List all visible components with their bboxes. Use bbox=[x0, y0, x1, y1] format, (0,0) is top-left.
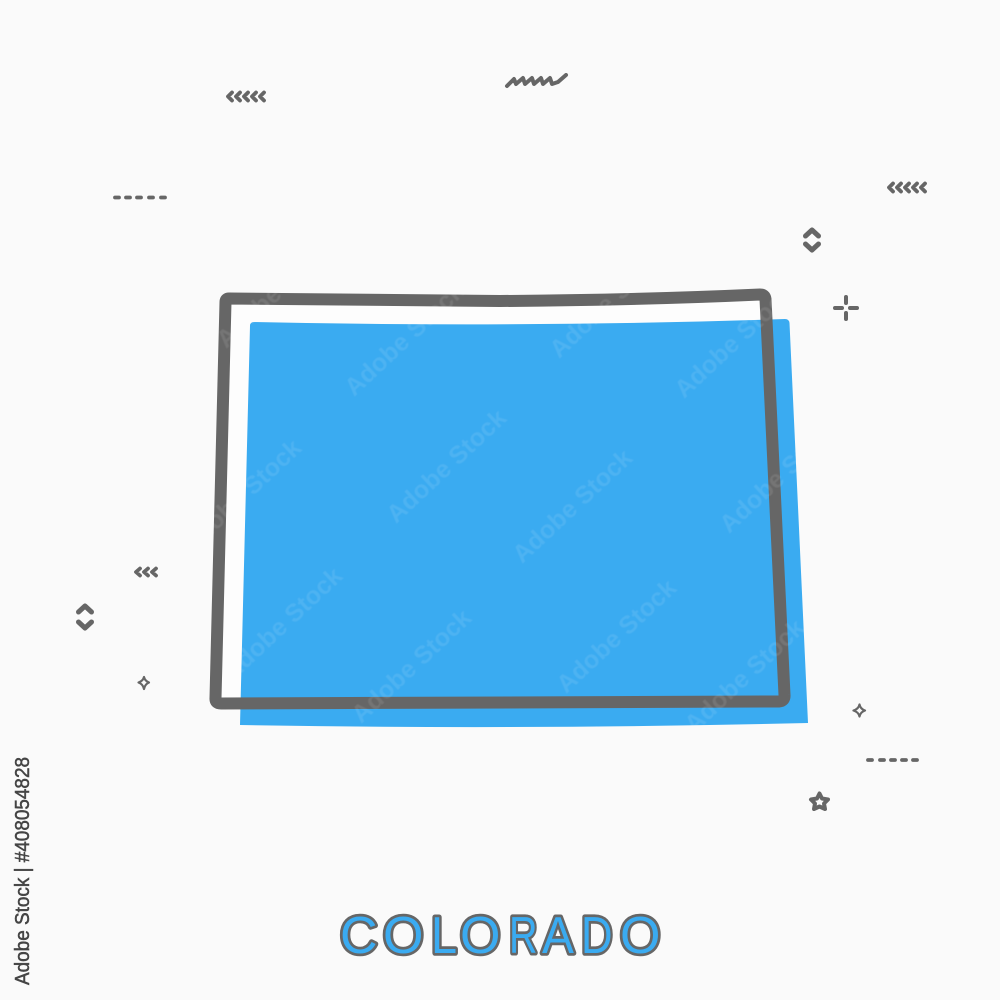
watermark pattern: Adobe Stock bbox=[679, 614, 810, 738]
watermark pattern: Adobe Stock bbox=[519, 774, 650, 898]
icon: chevrons top left bbox=[228, 92, 264, 100]
watermark pattern: Adobe Stock bbox=[829, 124, 960, 248]
watermark pattern: Adobe Stock bbox=[714, 414, 845, 538]
watermark pattern: Adobe Stock bbox=[59, 729, 190, 853]
watermark pattern: Adobe Stock bbox=[381, 404, 512, 528]
watermark pattern: Adobe Stock bbox=[184, 769, 315, 893]
icon: chevrons left bbox=[136, 568, 156, 576]
watermark pattern: Adobe Stock bbox=[859, 584, 990, 708]
watermark pattern: Adobe Stock bbox=[369, 69, 500, 193]
icon: dashes top left bbox=[115, 196, 165, 199]
watermark pattern: Adobe Stock bbox=[507, 444, 638, 568]
title: COLORADO: L bbox=[431, 907, 457, 965]
icon: up down chevrons right bbox=[806, 230, 818, 250]
watermark pattern: Adobe Stock bbox=[859, 249, 990, 373]
icon: star bbox=[811, 794, 828, 809]
watermark pattern: Adobe Stock bbox=[4, 264, 135, 388]
icon: up down chevrons left bbox=[78, 606, 92, 628]
watermark pattern: Adobe Stock bbox=[544, 239, 675, 363]
map: blue Colorado shape bbox=[240, 319, 808, 727]
watermark pattern: Adobe Stock bbox=[669, 279, 800, 403]
icon: sparkle left bbox=[138, 677, 149, 689]
title: COLORADO: R bbox=[509, 906, 538, 964]
watermark pattern: Adobe Stock bbox=[499, 111, 630, 235]
title: COLORADO: D bbox=[581, 908, 613, 965]
title: COLORADO: O bbox=[460, 907, 500, 965]
watermark pattern: Adobe Stock bbox=[702, 69, 833, 193]
icon: crosshair plus bbox=[835, 297, 857, 319]
title: COLORADO: O bbox=[620, 907, 660, 965]
icon: sparkle right bbox=[854, 704, 865, 716]
watermark pattern: Adobe Stock bbox=[849, 789, 980, 913]
title: COLORADO: C bbox=[340, 907, 378, 965]
watermark pattern: Adobe Stock bbox=[339, 277, 470, 401]
map: grey Colorado outline bbox=[215, 294, 785, 704]
watermark pattern: Adobe Stock bbox=[217, 562, 348, 686]
watermark pattern: Adobe Stock bbox=[839, 454, 970, 578]
watermark pattern: Adobe Stock bbox=[389, 734, 520, 858]
icon: chevrons top right bbox=[889, 184, 925, 192]
map: white inner fill of outline bbox=[215, 294, 785, 703]
title: COLORADO: A bbox=[542, 906, 575, 964]
watermark pattern: Adobe Stock bbox=[47, 394, 178, 518]
icon: zigzag top bbox=[507, 75, 566, 86]
watermark pattern: Adobe Stock bbox=[211, 229, 342, 353]
watermark pattern: Adobe Stock bbox=[166, 104, 297, 228]
title: COLORADO: O bbox=[383, 907, 423, 965]
title: COLORADO bbox=[340, 906, 660, 965]
watermark pattern: Adobe Stock bbox=[39, 64, 170, 188]
watermark pattern: Adobe Stock bbox=[14, 594, 145, 718]
icon: dashes bottom right bbox=[868, 758, 917, 762]
watermark pattern: Adobe Stock bbox=[176, 434, 307, 558]
watermark pattern: Adobe Stock bbox=[724, 744, 855, 868]
watermark pattern: Adobe Stock bbox=[551, 574, 682, 698]
watermark pattern: Adobe Stock bbox=[346, 604, 477, 728]
stock credit text: Adobe Stock | #408054828 bbox=[12, 757, 34, 985]
